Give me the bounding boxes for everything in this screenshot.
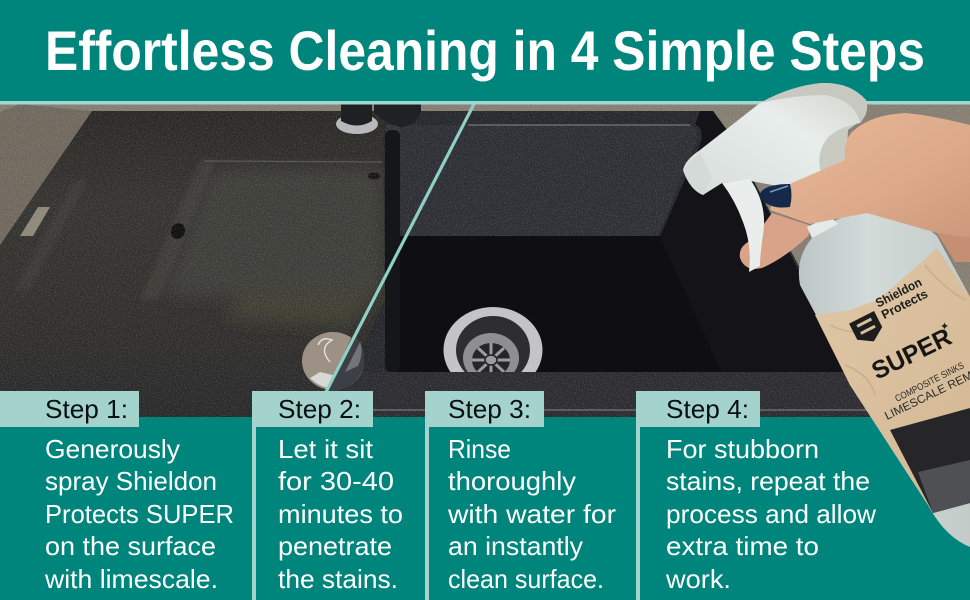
faucet post (341, 104, 372, 126)
sprayer rim (760, 83, 867, 123)
drainboard groove (205, 161, 382, 162)
drain strainer (472, 343, 510, 372)
left streaks (22, 185, 80, 286)
drain inner well (456, 316, 530, 372)
rim highlight (468, 124, 690, 126)
wood grain (830, 265, 965, 395)
step 2 text: for 30-40 (278, 466, 394, 496)
left counter side (0, 104, 92, 245)
step 4 divider (636, 391, 640, 600)
step 3 (425, 391, 616, 600)
dirty drainboard (0, 111, 385, 420)
star accent: ✦ (940, 321, 949, 333)
step 3 text: clean surface. (448, 564, 604, 594)
product name: SUPER (867, 323, 956, 385)
step 1 text: with limescale. (44, 564, 218, 594)
faucet base ring (336, 117, 378, 134)
spray bottle and hand (683, 83, 970, 547)
step 3 label: Step 3: (448, 394, 531, 424)
step 1 text: Protects SUPER (45, 499, 234, 529)
sprayer head (683, 83, 867, 195)
drain steel cone (463, 333, 519, 372)
palm lower edge (937, 233, 970, 262)
header band (0, 0, 970, 101)
step 2 label: Step 2: (278, 394, 361, 424)
photo: composite sink before and after (0, 104, 970, 424)
step 1 tab (0, 391, 139, 427)
button dirty side (302, 332, 364, 390)
bottle label (815, 248, 970, 514)
sink back wall (400, 125, 697, 236)
step 2 text: the stains. (278, 564, 398, 594)
step 1 text (44, 434, 234, 594)
button clean shine (345, 342, 362, 372)
sprayer collar (805, 120, 862, 190)
step 2 text (278, 434, 403, 594)
step 1 text: on the surface (45, 531, 216, 561)
step 3 text (447, 434, 616, 594)
back wall edge highlight (406, 236, 657, 240)
sprayer neck (807, 216, 838, 238)
drain outer ring (444, 307, 542, 372)
brand name (873, 275, 930, 322)
step 3 divider (425, 391, 429, 600)
limescale patch (165, 170, 380, 325)
sink left wall (385, 130, 400, 372)
brand line two: Protects (879, 287, 930, 322)
brand line one: Shieldon (873, 275, 924, 310)
step 1 (0, 391, 234, 594)
step 2 text: Let it sit (278, 434, 374, 464)
logo shield (849, 311, 886, 348)
step 4 label: Step 4: (666, 394, 749, 424)
step 2 divider (252, 391, 256, 600)
logo inner cut (857, 319, 875, 333)
step 1 label: Step 1: (45, 394, 128, 424)
step 4 text: extra time to (666, 531, 819, 561)
step 4 tab (636, 391, 760, 427)
strainer spokes (472, 343, 510, 372)
step 3 text: with water for (447, 499, 616, 529)
front rim (340, 372, 900, 422)
front rim highlight (370, 409, 890, 411)
step 4 text: stains, repeat the (666, 466, 870, 496)
step 3 text: Rinse (448, 434, 511, 464)
grain line (830, 322, 880, 332)
step 3 text: an instantly (448, 531, 583, 561)
grey haze (165, 170, 380, 295)
step 4 text: process and allow (666, 499, 876, 529)
step 2 (252, 391, 403, 600)
step 4 text: work. (665, 564, 731, 594)
drain (444, 307, 542, 372)
step 4 (636, 391, 876, 600)
sink glass-side tint (386, 125, 400, 134)
bottle body (799, 212, 970, 547)
hole spot (170, 223, 186, 239)
sink right wall (660, 111, 850, 372)
step 2 text: penetrate (278, 531, 392, 561)
nail shine (770, 186, 788, 192)
brown haze (225, 295, 372, 325)
step 4 text (665, 434, 876, 594)
pop-up button (302, 332, 364, 391)
label photo strip (890, 408, 970, 513)
label photo grey patch (918, 460, 970, 513)
step 2 tab (252, 391, 373, 427)
label mark on drainboard (20, 207, 50, 236)
small hole (368, 172, 380, 180)
button lower shine (310, 372, 345, 388)
strainer centre (485, 355, 497, 365)
step 1 text: spray Shieldon (45, 466, 217, 496)
step 4 text: For stubborn (666, 434, 819, 464)
diagonal divider (326, 104, 474, 392)
step 3 text: thoroughly (448, 466, 576, 496)
button highlight (318, 339, 332, 362)
label brand logo (849, 311, 886, 348)
back finger (740, 213, 812, 269)
faucet lever (374, 104, 421, 127)
hand (770, 113, 970, 238)
step 3 tab (425, 391, 544, 427)
faucet (336, 104, 421, 134)
step 1 text: Generously (45, 434, 180, 464)
spoke one (472, 358, 510, 362)
speckle texture (0, 104, 970, 424)
fingernail (759, 184, 792, 208)
step 2 text: minutes to (278, 499, 403, 529)
sink floor (388, 236, 722, 372)
counter top (0, 104, 970, 297)
button clean side (328, 336, 364, 391)
header rule (0, 101, 970, 104)
sprayer nose (683, 152, 712, 195)
sprayer trigger (722, 179, 764, 272)
drainboard streak (144, 162, 212, 298)
sink clean region (364, 111, 800, 372)
steps panel (0, 417, 970, 600)
